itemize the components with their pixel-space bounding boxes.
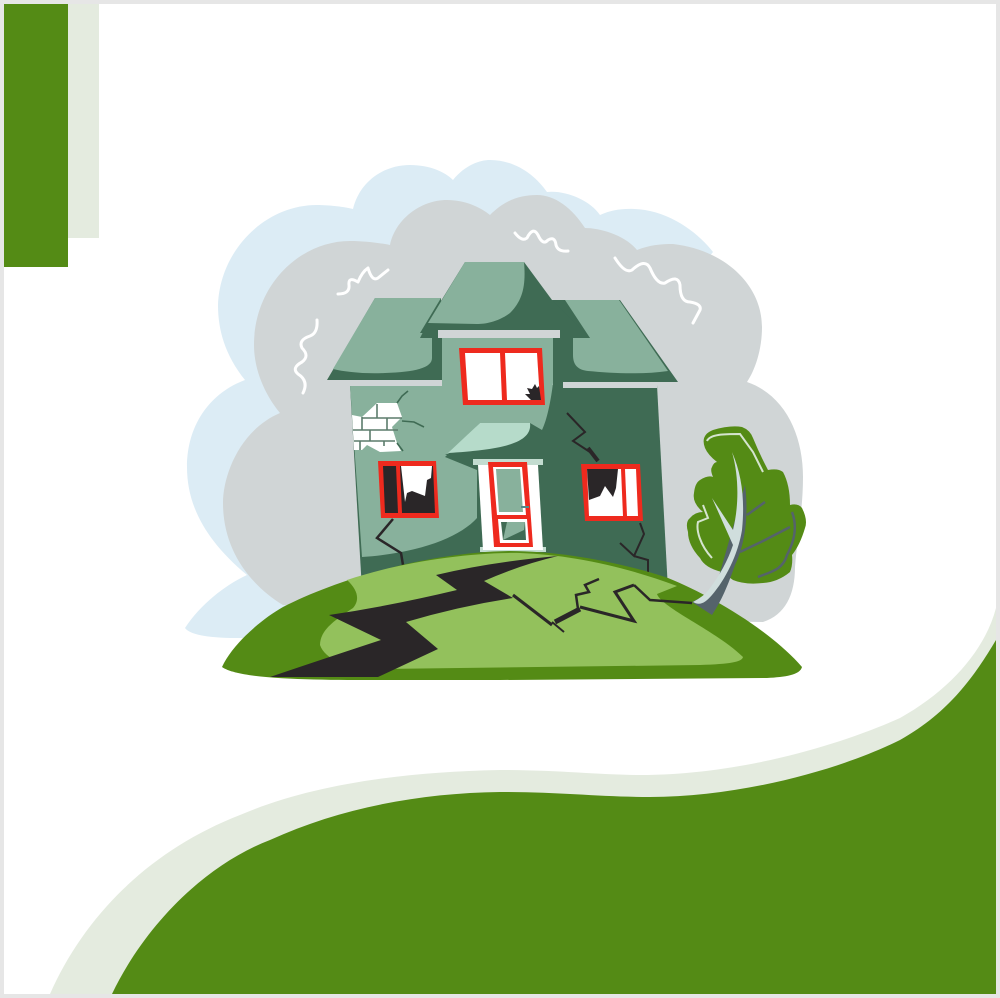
house walls [350, 338, 668, 590]
tree highlights [698, 434, 763, 558]
tree foliage [687, 426, 806, 584]
top-left corner accent [4, 4, 99, 267]
tree trunk shadow [692, 485, 747, 615]
blue background cloud [185, 160, 713, 640]
roofs [327, 262, 678, 392]
door [473, 459, 546, 552]
tree [687, 426, 806, 615]
illustration: damaged house [185, 160, 806, 680]
window: upper [459, 348, 545, 405]
gray dust cloud [223, 195, 803, 622]
grassy hill [222, 551, 802, 680]
center roof [420, 262, 590, 392]
exposed brick wall [352, 391, 424, 452]
ground cracks [513, 579, 692, 632]
window: right broken [581, 464, 643, 521]
window: left broken [378, 461, 439, 518]
tree branches [740, 502, 795, 577]
ground fissure [270, 556, 558, 677]
wall cracks [377, 413, 648, 585]
left roof [327, 298, 442, 380]
tree trunk [693, 452, 743, 604]
porch canopy [445, 423, 530, 463]
right roof [552, 300, 678, 382]
bottom wave [50, 608, 996, 994]
lightning squiggles [295, 231, 700, 393]
